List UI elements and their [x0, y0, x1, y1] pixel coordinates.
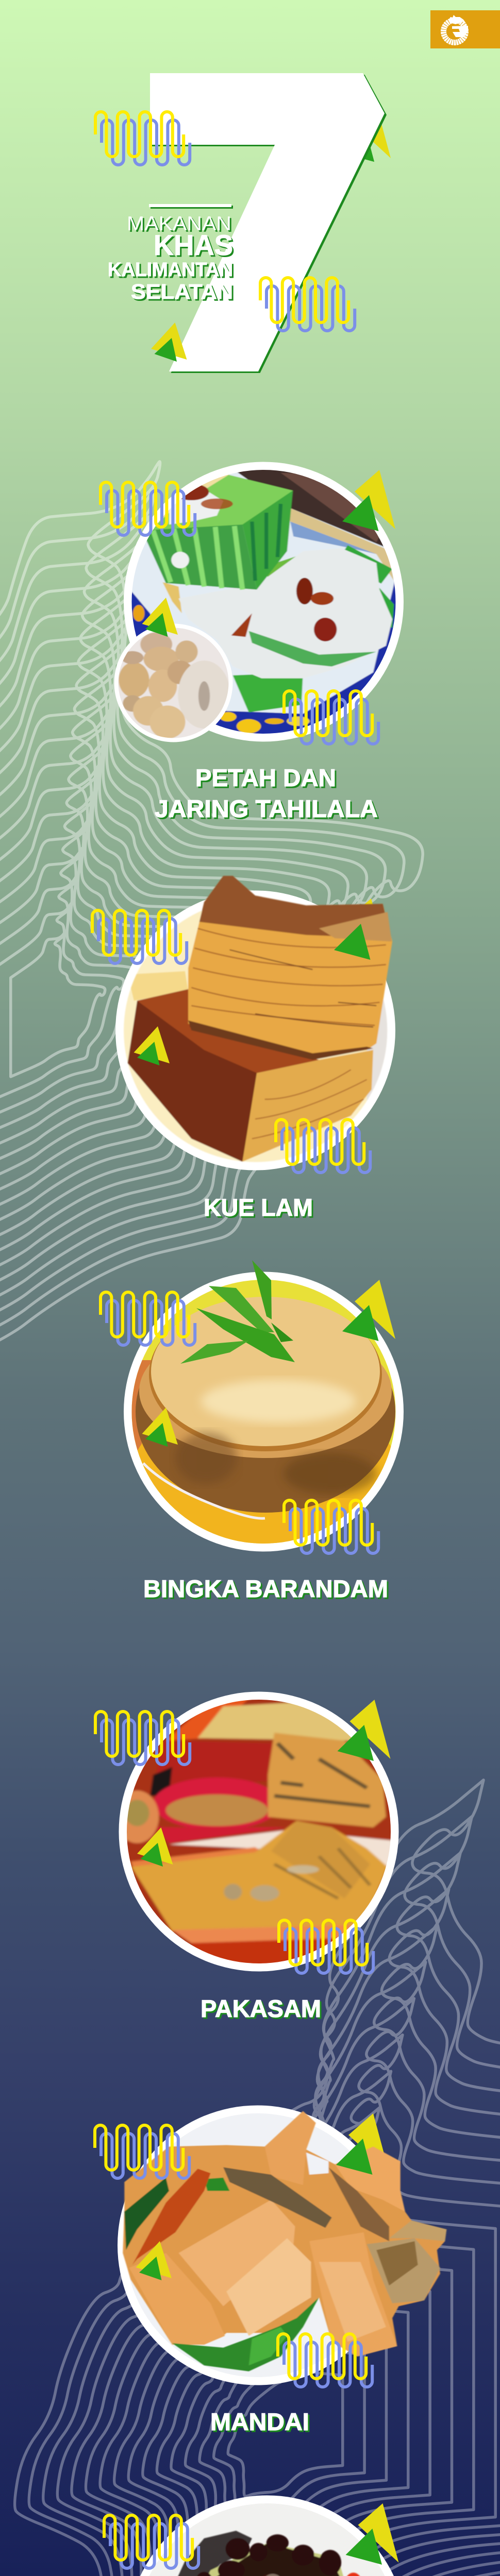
title block: SELATAN	[131, 280, 233, 303]
squiggle: kue lam top	[92, 910, 187, 963]
squiggle: mandai top	[95, 2125, 189, 2178]
triangles: pakasam	[137, 1700, 391, 1867]
label: petah dan jaring tahilala: PETAH DAN	[195, 764, 336, 791]
label: pakasam: PAKASAM	[201, 1995, 321, 2022]
title block: KHAS	[154, 229, 233, 261]
title block: MAKANAN	[127, 213, 231, 235]
squiggle: pakasam top	[95, 1711, 190, 1765]
squiggle: kue lam bottom	[276, 1120, 370, 1173]
contour map: upper left	[0, 462, 423, 1432]
triangles: haliling	[145, 2503, 399, 2576]
label: mandai: MANDAI	[210, 2408, 309, 2435]
title block	[108, 204, 233, 303]
food 5: mandai	[118, 2105, 446, 2385]
label: petah dan jaring tahilala: JARING TAHILALA	[155, 795, 378, 822]
squiggle: petah top	[101, 482, 195, 535]
squiggle: header bottom	[260, 278, 355, 331]
food 1b: small inset of jaring	[114, 623, 233, 742]
logo badge	[430, 10, 500, 48]
label: bingka barandam: BINGKA BARANDAM	[143, 1575, 388, 1602]
food 3: bingka barandam	[124, 1272, 405, 1552]
squiggle: bingka top	[101, 1292, 195, 1345]
triangles: kue lam	[134, 924, 370, 1065]
triangles: petah	[142, 470, 395, 637]
title block: KALIMANTAN	[108, 259, 233, 281]
food 2: kue lam	[115, 876, 395, 1171]
header: big number 7	[150, 73, 391, 373]
label: petah dan jaring tahilala	[155, 764, 378, 822]
squiggle: petah bottom	[284, 691, 378, 744]
leaves garnish	[180, 1260, 295, 1364]
squiggle: pakasam bottom	[279, 1920, 373, 1973]
food 4: pakasam	[115, 1692, 399, 1971]
label: kue lam: KUE LAM	[204, 1194, 313, 1221]
triangles: bingka	[142, 1280, 395, 1447]
contour map: lower right	[15, 1780, 500, 2576]
squiggle: mandai bottom	[278, 2334, 372, 2387]
squiggle: haliling top	[104, 2515, 198, 2568]
food 1: petah dan jaring tahilala	[121, 462, 408, 747]
squiggle: bingka bottom	[284, 1500, 378, 1553]
triangles: header	[151, 323, 187, 362]
triangles: mandai	[136, 2139, 372, 2280]
food 6: haliling	[127, 2496, 407, 2576]
squiggle: header top	[95, 112, 190, 165]
